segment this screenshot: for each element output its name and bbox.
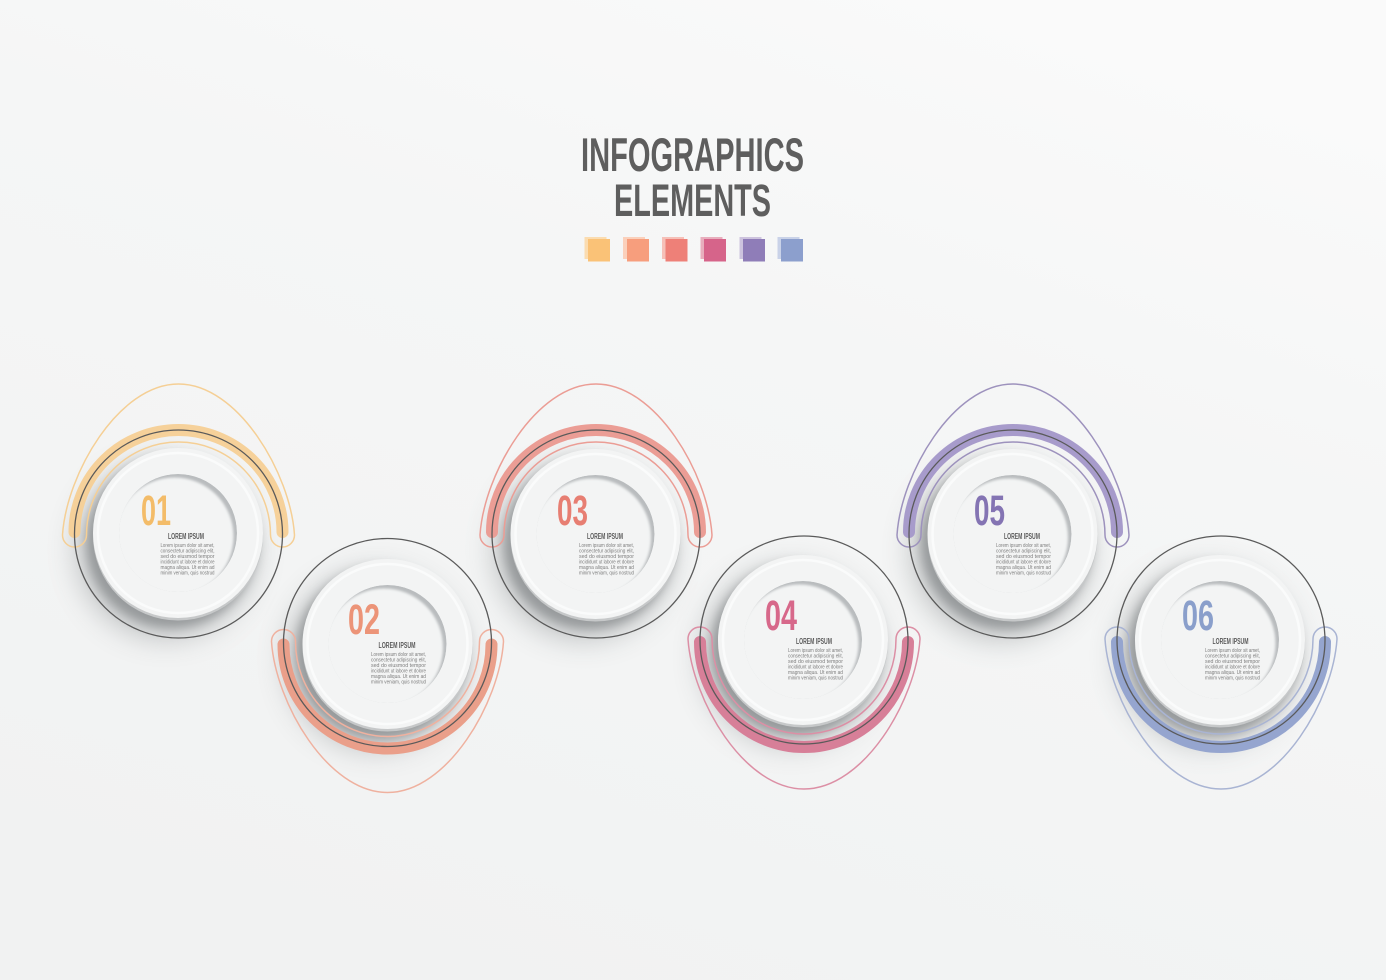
text 03: incididunt ut labore et dolore (579, 560, 634, 566)
text 01: sed do eiusmod tempor (160, 554, 215, 560)
arc frame 03 (480, 384, 712, 547)
title: ELEMENTS (614, 175, 771, 226)
step 01 (62, 384, 294, 639)
text 02: incididunt ut labore et dolore (371, 668, 426, 674)
text 02: sed do eiusmod tempor (371, 663, 426, 669)
text 01: magna aliqua. Ut enim ad (160, 565, 215, 571)
text 05 (996, 532, 1051, 576)
text 03: consectetur adipiscing elit, (579, 548, 634, 554)
ring 01 (74, 430, 282, 638)
arc frame 05 (897, 384, 1129, 547)
text 02: minim veniam, quis nostrud (371, 680, 426, 686)
text 02: consectetur adipiscing elit, (371, 658, 426, 664)
arc frame 04 (688, 627, 920, 789)
number 05: 05 (974, 487, 1005, 535)
text 04: LOREM IPSUM (796, 637, 832, 646)
number 03: 03 (557, 487, 588, 535)
text 05: Lorem ipsum dolor sit amet, (996, 543, 1051, 549)
text 02: magna aliqua. Ut enim ad (371, 674, 426, 680)
title (581, 128, 804, 226)
text 02: LOREM IPSUM (378, 641, 416, 650)
text 03: Lorem ipsum dolor sit amet, (579, 543, 634, 549)
text 05: magna aliqua. Ut enim ad (996, 565, 1051, 571)
number 02: 02 (348, 596, 380, 644)
text 04: minim veniam, quis nostrud (788, 676, 843, 682)
text 05: consectetur adipiscing elit, (996, 548, 1051, 554)
text 05: minim veniam, quis nostrud (996, 570, 1051, 576)
text 01: LOREM IPSUM (168, 532, 204, 541)
number 06: 06 (1182, 592, 1214, 640)
text 02: Lorem ipsum dolor sit amet, (371, 652, 426, 658)
step 06 (1105, 536, 1337, 789)
text 04: sed do eiusmod tempor (788, 659, 843, 665)
text 01: consectetur adipiscing elit, (160, 548, 214, 554)
step 02 (272, 538, 504, 792)
step 04 (688, 536, 920, 789)
text 04: consectetur adipiscing elit, (788, 654, 843, 660)
arc frame 01 (62, 384, 294, 547)
text 06: minim veniam, quis nostrud (1205, 676, 1260, 682)
step 03 (480, 384, 712, 640)
text 05: LOREM IPSUM (1004, 532, 1040, 541)
ring 04 (700, 536, 908, 744)
step 05 (897, 384, 1129, 640)
number 01: 01 (141, 487, 171, 535)
text 05: sed do eiusmod tempor (996, 554, 1051, 560)
text 04 (788, 637, 843, 682)
text 04: Lorem ipsum dolor sit amet, (788, 648, 843, 654)
ring 05 (909, 430, 1117, 638)
text 01 (160, 532, 215, 576)
ring 06 (1117, 536, 1325, 744)
ring 03 (492, 430, 700, 638)
text 06: magna aliqua. Ut enim ad (1205, 670, 1260, 676)
text 01: incididunt ut labore et dolore (160, 560, 215, 566)
text 06: LOREM IPSUM (1212, 637, 1249, 646)
text 01: Lorem ipsum dolor sit amet, (160, 543, 214, 549)
text 04: magna aliqua. Ut enim ad (788, 670, 843, 676)
text 03: sed do eiusmod tempor (579, 554, 634, 560)
arc frame 02 (272, 630, 504, 792)
text 05: incididunt ut labore et dolore (996, 560, 1051, 566)
text 03: LOREM IPSUM (587, 532, 623, 541)
title: INFOGRAPHICS (581, 128, 804, 181)
text 03: minim veniam, quis nostrud (579, 570, 634, 576)
ring 02 (284, 538, 492, 746)
text 06: consectetur adipiscing elit, (1205, 654, 1260, 660)
text 02 (371, 641, 426, 686)
text 06: sed do eiusmod tempor (1205, 659, 1260, 665)
text 01: minim veniam, quis nostrud (160, 570, 215, 576)
text 06: Lorem ipsum dolor sit amet, (1205, 648, 1260, 654)
number 04: 04 (765, 592, 797, 640)
text 03 (579, 532, 634, 576)
arc frame 06 (1105, 627, 1337, 789)
text 04: incididunt ut labore et dolore (788, 664, 843, 670)
text 06: incididunt ut labore et dolore (1205, 664, 1260, 670)
text 03: magna aliqua. Ut enim ad (579, 565, 634, 571)
text 06 (1205, 637, 1260, 682)
colour swatches (584, 237, 803, 262)
